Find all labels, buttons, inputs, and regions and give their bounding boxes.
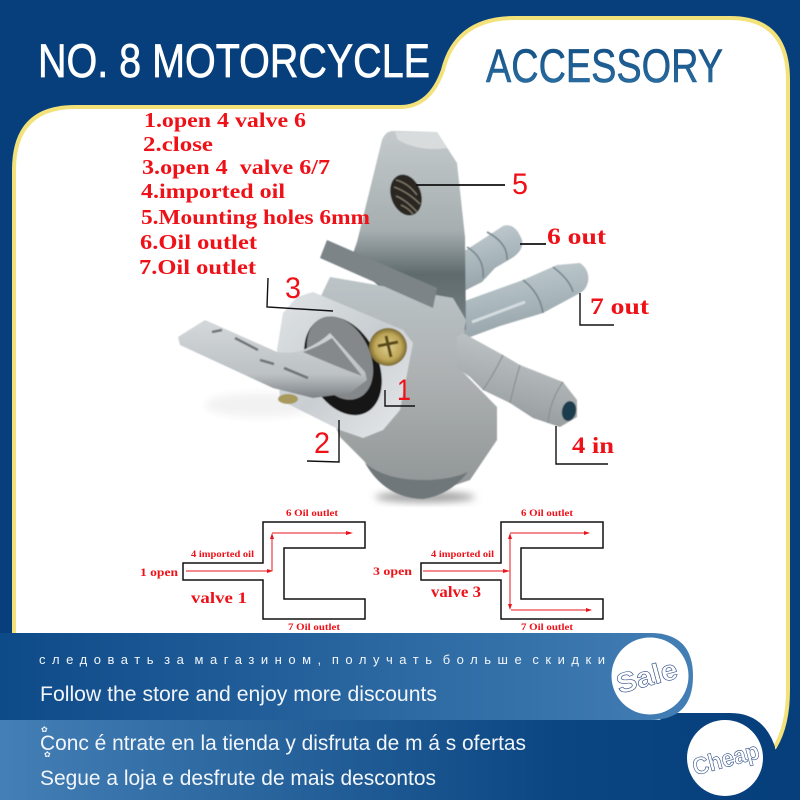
icon: rear screw nut (278, 394, 298, 404)
chart: valve 3 diagram: valve 3 (431, 584, 481, 601)
text block: legend list: 7.Oil outlet (139, 255, 256, 279)
text block: legend list: 6.Oil outlet (140, 230, 257, 254)
chart: valve 1 diagram: 1 open (140, 565, 178, 579)
panel: lower promo band (0, 713, 775, 800)
icon: valve face plate (277, 292, 413, 438)
text block: legend list: 2.close (143, 132, 213, 156)
chart: valve 1 diagram: valve 1 (191, 590, 247, 607)
text: english line: Follow the store and enjoy more discounts (40, 683, 437, 706)
callout: 3: 3 (285, 272, 301, 305)
title: NO. 8 MOTORCYCLE (38, 34, 430, 87)
callout: 4 in (556, 426, 614, 464)
callout: 6 out: 6 out (547, 224, 606, 249)
icon: bottom knob (365, 463, 468, 499)
chart: valve 3 diagram (373, 508, 603, 632)
badge: cheap: Cheap (690, 738, 762, 781)
callout: 5: 5 (512, 168, 528, 201)
icon: valve body (300, 277, 497, 497)
photo: fuel valve (178, 131, 588, 502)
callout: 7 out: 7 out (590, 294, 649, 319)
icon: fuel lever (178, 320, 367, 398)
text block: legend list (139, 108, 371, 279)
icon: inlet pipe 4 (457, 333, 578, 427)
panel: upper promo band (0, 633, 693, 720)
callout: 6 out (520, 224, 606, 249)
chart: valve 3 diagram: 7 Oil outlet (521, 622, 573, 632)
heading: accessory: ACCESSORY (486, 39, 723, 92)
callout: 1: 1 (397, 374, 411, 407)
text block: legend list: 4.imported oil (141, 179, 285, 203)
badge: sale: Sale (613, 654, 681, 700)
badge: cheap (687, 720, 763, 796)
chart: valve 1 diagram: 4 imported oil (191, 549, 255, 559)
chart: valve 1 diagram (140, 508, 365, 632)
callout: 4 in: 4 in (572, 433, 614, 458)
icon: ear top highlight (395, 132, 447, 149)
text: russian line: следовать за магазином, получать больше скидки (39, 652, 605, 667)
chart: valve 1 diagram: 6 Oil outlet (286, 508, 338, 518)
callout: 3 (267, 272, 333, 311)
icon: threaded hole (385, 170, 427, 220)
chart: valve 3 diagram: 3 open (373, 564, 412, 578)
text: spanish line: Conc é ntrate en la tienda y disfruta de m á s ofertas (40, 732, 526, 755)
text block: legend list: 3.open 4 valve 6/7 (142, 155, 330, 179)
callout: 5 (416, 168, 528, 201)
callout: 7 out (580, 293, 649, 325)
text block: legend list: 5.Mounting holes 6mm (141, 205, 371, 229)
icon: lever socket ring (289, 304, 397, 428)
text: portuguese line: Segue a loja e desfrute de mais descontos (40, 767, 436, 790)
icon: mounting ear (350, 131, 466, 330)
chart: valve 1 diagram: 7 Oil outlet (288, 622, 340, 632)
icon: flower marks: ✿ (41, 725, 48, 734)
icon: outlet pipe 6 (458, 225, 522, 292)
badge: sale (612, 638, 688, 714)
callout: 1 (385, 374, 415, 407)
icon: flower marks (41, 725, 51, 759)
chart: valve 3 diagram: 6 Oil outlet (521, 508, 573, 518)
icon: top slab (320, 240, 437, 308)
text block: legend list: 1.open 4 valve 6 (144, 108, 306, 132)
callout: 2: 2 (314, 427, 330, 460)
chart: valve 3 diagram: 4 imported oil (431, 549, 495, 559)
icon: flower marks: ✿ (44, 750, 51, 759)
callout: 2 (307, 420, 339, 462)
icon: screw (369, 328, 407, 366)
icon: outlet pipe 7 (462, 263, 588, 340)
